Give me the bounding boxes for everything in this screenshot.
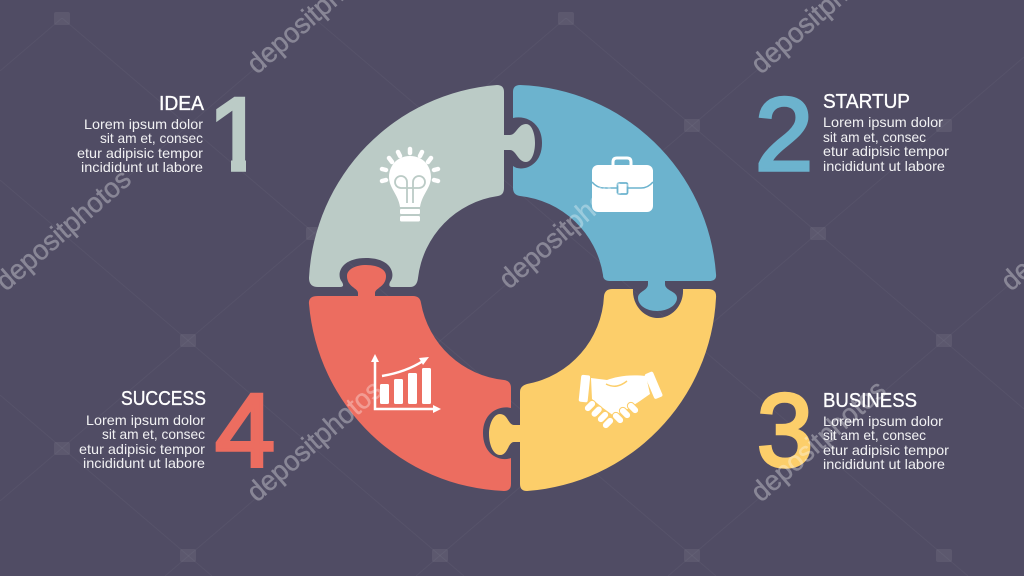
text block: startup (823, 114, 949, 174)
item 3: business (823, 390, 949, 472)
icon: light bulb (382, 149, 438, 222)
watermarks: depositphotos (745, 374, 892, 508)
text block: idea: sit am et, consec (100, 130, 203, 146)
puzzle piece: success (red) (309, 265, 511, 491)
text block: success: sit am et, consec (102, 426, 205, 442)
icon: growth chart (371, 354, 441, 413)
text block: idea: incididunt ut labore (81, 159, 203, 175)
text block: success: Lorem ipsum dolor (86, 412, 205, 428)
puzzle piece: idea (grey) (309, 85, 535, 287)
number 2: 2 (755, 77, 813, 193)
text block: idea: etur adipisic tempor (77, 145, 203, 161)
icon: handshake (579, 371, 663, 430)
heading: startup: STARTUP (823, 91, 910, 113)
text block: success (79, 412, 205, 471)
text block: startup: sit am et, consec (823, 129, 926, 145)
text block: startup: Lorem ipsum dolor (823, 114, 943, 130)
text block: idea (77, 116, 203, 175)
heading: business: BUSINESS (823, 390, 917, 412)
number 1: 1 (208, 77, 266, 193)
text block: startup: etur adipisic tempor (823, 143, 949, 159)
text block: success: etur adipisic tempor (79, 441, 205, 457)
number 3: 3 (757, 373, 813, 489)
text block: business: incididunt ut labore (823, 456, 945, 472)
heading: success: SUCCESS (121, 388, 206, 410)
text block: business (823, 413, 949, 472)
item 1: idea (77, 93, 205, 175)
icon: briefcase (592, 158, 653, 212)
puzzle piece: business (yellow) (489, 289, 716, 491)
text block: business: etur adipisic tempor (823, 442, 949, 458)
heading: idea: IDEA (159, 93, 205, 115)
item 2: startup (823, 91, 949, 174)
text block: success: incididunt ut labore (83, 455, 205, 471)
item 4: success (79, 388, 206, 471)
puzzle piece: startup (blue) (513, 85, 716, 311)
text block: business: sit am et, consec (823, 427, 926, 443)
watermarks: depositphotos (241, 374, 388, 508)
text block: idea: Lorem ipsum dolor (84, 116, 203, 132)
text block: startup: incididunt ut labore (823, 158, 945, 174)
watermarks: depositphotos (493, 161, 640, 295)
number 4: 4 (215, 373, 275, 489)
text block: business: Lorem ipsum dolor (823, 413, 943, 429)
